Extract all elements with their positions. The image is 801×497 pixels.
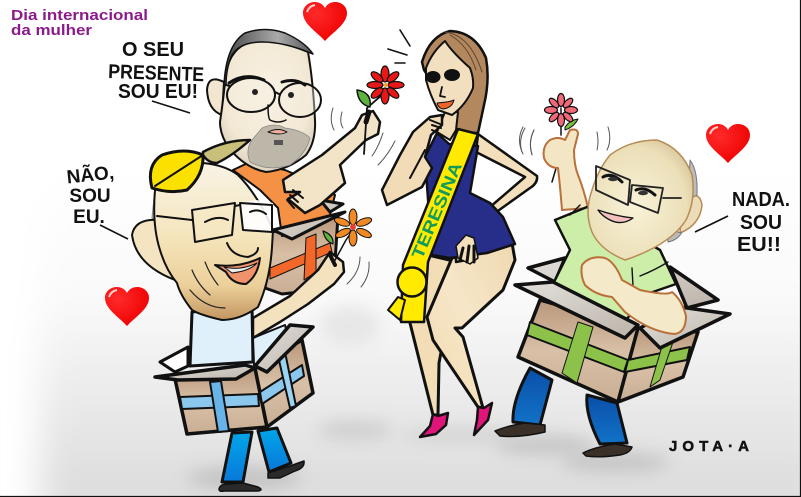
hair [224, 30, 313, 85]
title: Dia internacional [11, 8, 148, 24]
shoes [219, 483, 261, 491]
light blue shirt [190, 305, 253, 366]
flower: orange [323, 209, 373, 262]
motion lines [347, 257, 369, 287]
speech: nada sou eu: SOU [740, 212, 782, 234]
side hair [152, 188, 170, 225]
nose and lips [440, 87, 445, 97]
heart: left [105, 287, 149, 326]
raised arm [544, 130, 588, 210]
trousers [222, 432, 252, 482]
woman with sash [382, 30, 537, 437]
title: da mulher [11, 23, 92, 39]
sash text: TERESINA [408, 159, 466, 262]
eyes and brows [229, 77, 305, 122]
green shirt [554, 207, 676, 325]
speech: o seu presente sou eu: PRESENTE [108, 61, 205, 86]
speech: nada sou eu: NADA. [732, 189, 790, 211]
rosette [398, 268, 426, 296]
ear [207, 79, 224, 115]
gift box: blue ribbon [155, 325, 313, 434]
right arm [456, 134, 537, 262]
signature: JOTA·A [669, 438, 749, 455]
back box flap [160, 347, 188, 372]
raised arm [283, 111, 380, 213]
head [154, 163, 273, 320]
man with orange shirt [207, 30, 404, 294]
gift box: green ribbon [515, 282, 730, 402]
orange shirt [233, 162, 335, 236]
heart: right [706, 124, 750, 163]
eyes and mouth [598, 175, 655, 223]
motion lines [520, 127, 610, 155]
face [426, 41, 473, 115]
trousers [513, 368, 552, 425]
front leg and thigh [427, 243, 515, 408]
speech: nao sou eu [66, 162, 128, 239]
motion lines [331, 108, 395, 165]
neck [437, 112, 458, 140]
man with green shirt [495, 94, 730, 457]
speech: nao sou eu: EU. [73, 207, 105, 228]
hand on hip [456, 235, 478, 264]
ear [680, 195, 702, 233]
hair [422, 31, 488, 133]
lower arm and hand [581, 257, 686, 334]
speech: o seu presente sou eu [108, 39, 205, 113]
sash [401, 129, 478, 322]
speech: nao sou eu: NÃO, [66, 162, 115, 188]
head [588, 140, 693, 260]
back leg [410, 255, 458, 415]
raised arm with flower [253, 252, 344, 338]
head [220, 41, 315, 172]
back flaps [528, 258, 718, 308]
nose and mouth [190, 243, 260, 308]
attention lines [388, 30, 410, 63]
box flaps [273, 200, 345, 239]
heart: top [303, 2, 347, 41]
gift box: orange ribbon [265, 216, 338, 294]
side hair [668, 160, 697, 242]
speech: nao sou eu: SOU [69, 186, 111, 207]
glasses [596, 166, 681, 213]
sash tail [388, 297, 405, 320]
flower: red [357, 66, 404, 154]
pink shoes [420, 403, 492, 437]
yellow cap [150, 151, 203, 192]
shoes [495, 423, 545, 436]
speech: nada sou eu [695, 189, 790, 256]
left arm [382, 115, 442, 205]
speech: o seu presente sou eu: O SEU [122, 39, 184, 61]
speech: nada sou eu: EU!! [737, 234, 781, 256]
ear [132, 220, 175, 280]
navy dress [425, 133, 515, 258]
glasses [226, 78, 321, 117]
eyes [426, 69, 460, 83]
flower: pink [544, 94, 578, 182]
beard [248, 125, 310, 168]
glasses [157, 200, 275, 242]
man with yellow cap [132, 140, 373, 491]
speech: o seu presente sou eu: SOU EU! [118, 81, 198, 103]
